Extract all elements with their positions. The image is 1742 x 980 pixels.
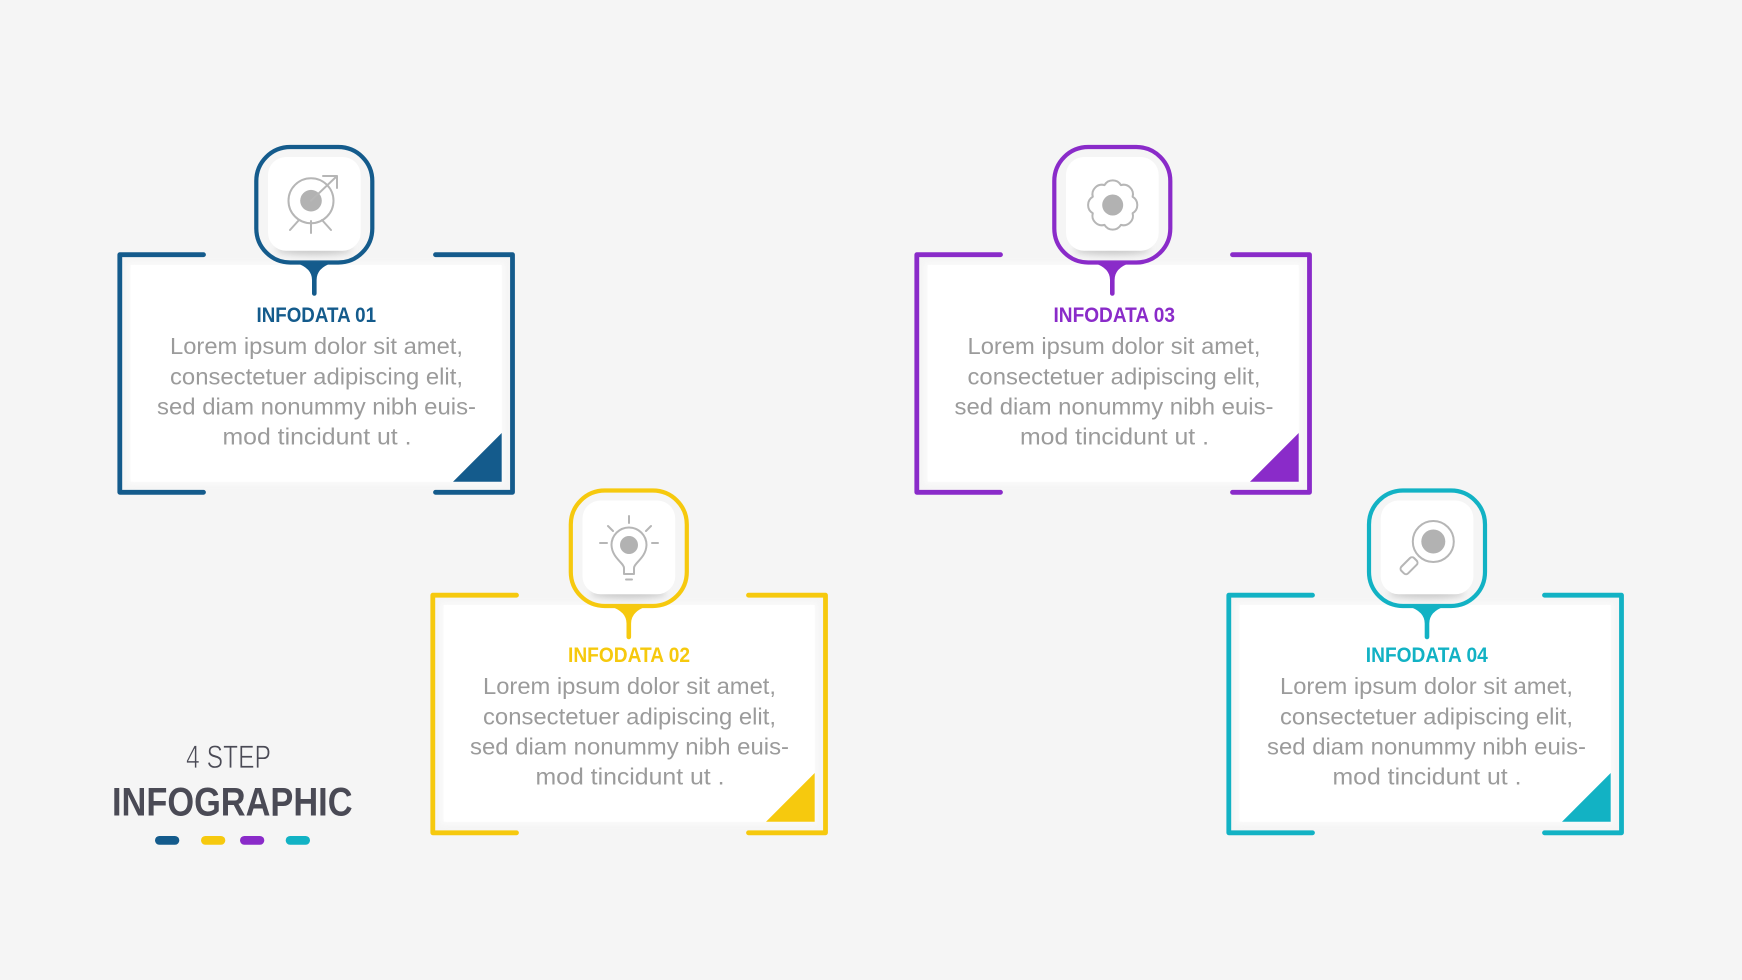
body text	[470, 673, 789, 790]
icon: light bulb	[600, 516, 658, 580]
body text: consectetuer adipiscing elit,	[483, 704, 776, 730]
colour key dashes	[155, 836, 310, 845]
body text	[157, 333, 476, 450]
pin marker	[256, 147, 372, 296]
body text: consectetuer adipiscing elit,	[170, 364, 463, 390]
body text: mod tincidunt ut .	[536, 764, 724, 790]
bracket frame	[1229, 595, 1622, 833]
corner triangle	[1250, 433, 1299, 482]
body text	[954, 333, 1274, 450]
corner triangle	[766, 773, 815, 822]
body text: mod tincidunt ut .	[1020, 424, 1209, 450]
pin marker	[1054, 147, 1170, 296]
body text: Lorem ipsum dolor sit amet,	[483, 673, 776, 699]
body text: sed diam nonummy nibh euis-	[470, 734, 789, 760]
body text: Lorem ipsum dolor sit amet,	[968, 333, 1260, 359]
body text: mod tincidunt ut .	[1332, 764, 1522, 790]
corner triangle	[453, 433, 502, 482]
title line: infographic: INFOGRAPHIC	[112, 780, 352, 824]
body text: sed diam nonummy nibh euis-	[1267, 734, 1586, 760]
pin marker	[571, 490, 687, 639]
heading: INFODATA 01	[256, 303, 376, 327]
body text: sed diam nonummy nibh euis-	[954, 394, 1274, 420]
title line: 4 step: 4 STEP	[186, 739, 271, 775]
body text: Lorem ipsum dolor sit amet,	[1280, 673, 1573, 699]
white text panel	[441, 603, 817, 824]
heading: INFODATA 02	[568, 643, 690, 667]
panel: infodata 02	[433, 490, 826, 833]
body text: Lorem ipsum dolor sit amet,	[170, 333, 463, 359]
panel: infodata 03	[917, 147, 1310, 492]
body text: consectetuer adipiscing elit,	[968, 364, 1260, 390]
heading: INFODATA 03	[1054, 303, 1175, 327]
icon: target with arrow	[288, 176, 337, 233]
panel: infodata 01	[120, 147, 513, 492]
icon: gear	[1088, 180, 1137, 230]
white text panel	[925, 263, 1301, 484]
white text panel	[1237, 603, 1613, 824]
bracket frame	[433, 595, 826, 833]
body text	[1267, 673, 1586, 790]
body text: mod tincidunt ut .	[222, 424, 412, 450]
body text: sed diam nonummy nibh euis-	[157, 394, 476, 420]
panel: infodata 04	[1229, 490, 1622, 833]
title block	[112, 739, 352, 845]
heading: INFODATA 04	[1366, 643, 1488, 667]
corner triangle	[1562, 773, 1611, 822]
white text panel	[128, 263, 504, 484]
icon: magnifier	[1399, 521, 1454, 575]
body text: consectetuer adipiscing elit,	[1280, 704, 1573, 730]
bracket frame	[120, 255, 513, 492]
bracket frame	[917, 255, 1310, 492]
pin marker	[1369, 490, 1485, 639]
